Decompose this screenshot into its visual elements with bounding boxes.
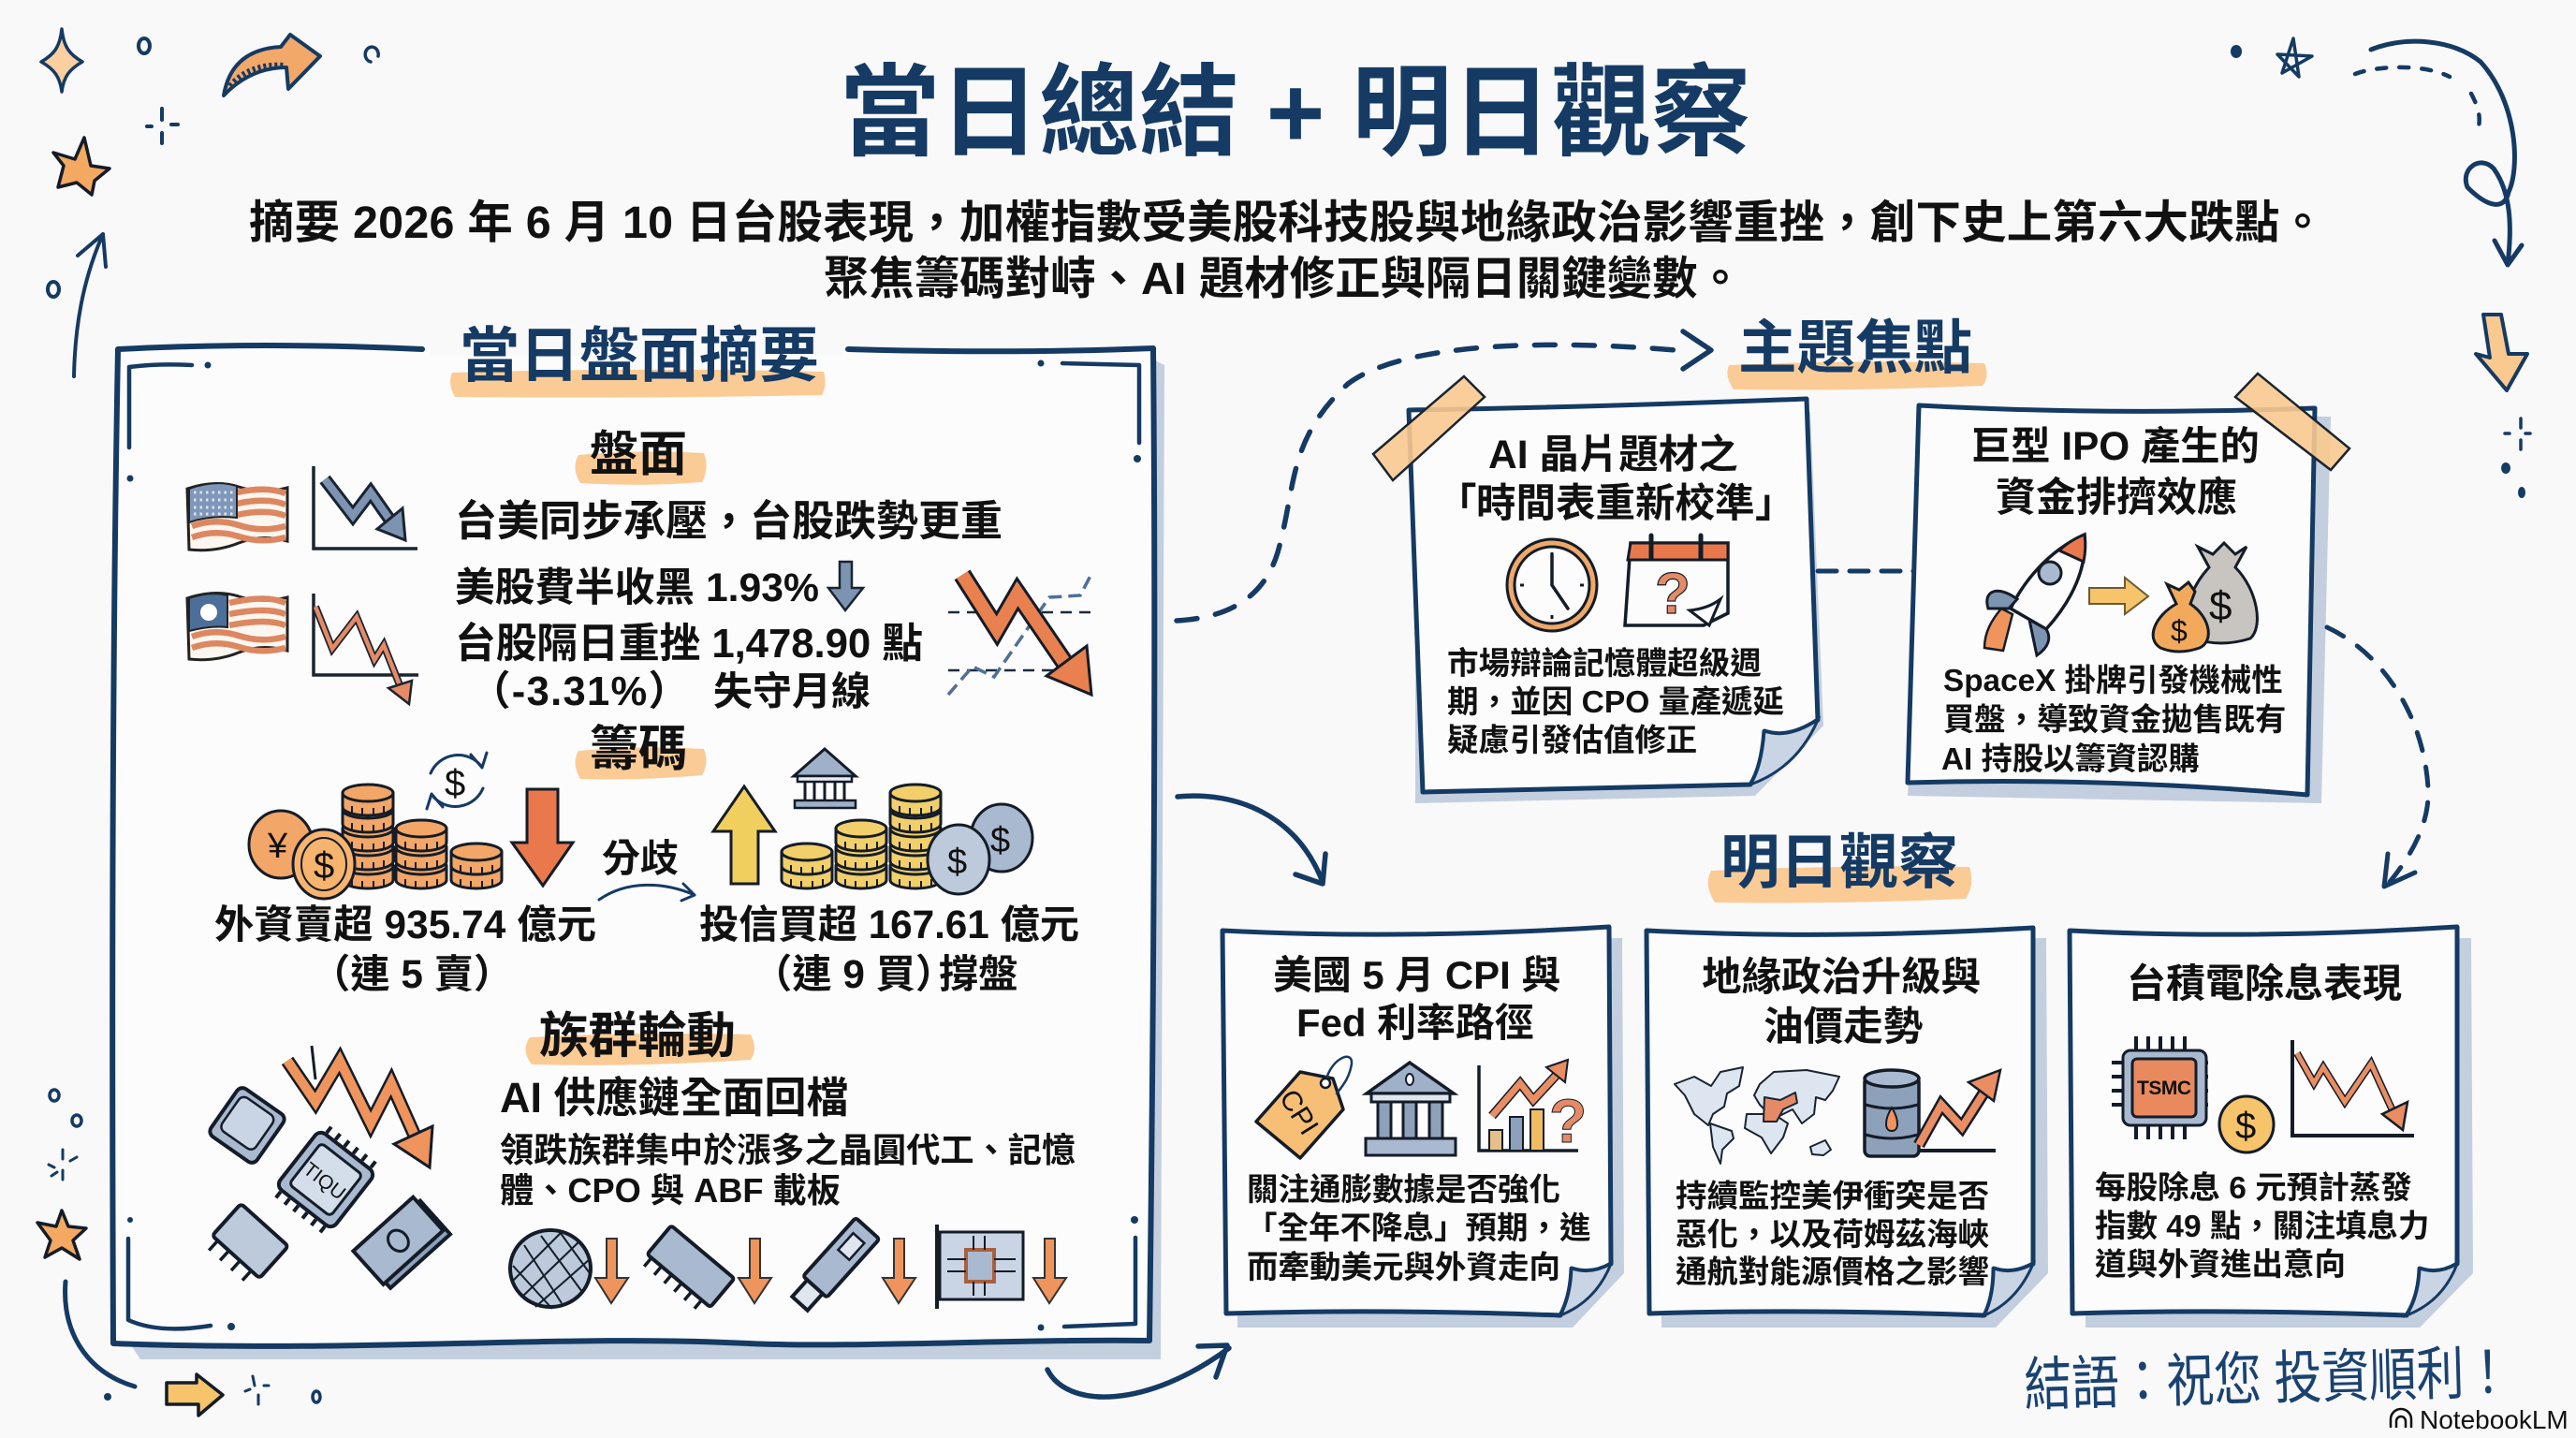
section: 盤面: 盤面 — [590, 428, 687, 482]
subtitle: 摘要 2026 年 6 月 10 日台股表現，加權指數受美股科技股與地緣政治影響重挫，創下史上第六大跌點。 — [249, 198, 2325, 248]
icon: falling chart — [2292, 1040, 2414, 1136]
icon: dividend coin — [2219, 1096, 2274, 1152]
tape — [2235, 374, 2349, 470]
icon: world map — [1675, 1067, 1839, 1164]
logo: NotebookLM: NotebookLM — [2420, 1405, 2569, 1434]
card: CPI: 「全年不降息」預期，進 — [1246, 1211, 1591, 1246]
heading: 當日盤面摘要 — [460, 322, 819, 389]
icon: US flag — [187, 483, 287, 550]
icon: institutional coins — [782, 785, 1032, 894]
icon: uncertain rate chart — [1479, 1060, 1587, 1155]
text: 分歧: 分歧 — [602, 837, 679, 880]
text: trust buying — [699, 902, 1079, 996]
icon: falling chart US — [314, 466, 417, 549]
icon: currency cycle — [427, 753, 487, 809]
icon: currency cycle: $ — [445, 763, 465, 804]
connector: dashed between cards — [1818, 569, 1915, 573]
title: 當日總結 + 明日觀察 — [840, 56, 1751, 169]
text: foreign selling — [214, 902, 596, 996]
card: 地緣政治: 通航對能源價格之影響 — [1676, 1255, 1989, 1290]
icon: rising arrow — [1919, 1070, 2000, 1151]
arrow: dashed to 主題焦點 — [1177, 345, 1676, 621]
icon: money bags — [2153, 543, 2257, 652]
icon: Taiwan flag — [187, 593, 287, 660]
panel frame — [112, 348, 1154, 1346]
text: TAIEX: 台股隔日重挫 1,478.90 點 — [455, 621, 923, 667]
section: 籌碼: 籌碼 — [590, 723, 687, 777]
text: AI supply chain: 領跌族群集中於漲多之晶圓代工、記憶 — [500, 1131, 1076, 1169]
arrow: bottom curve — [1047, 1345, 1229, 1397]
arrowhead: 主題焦點 — [1683, 331, 1711, 369]
icon: arrow to bags — [2089, 578, 2148, 614]
card: 台積電 — [2070, 927, 2473, 1328]
text: foreign selling: 外資賣超 935.74 億元 — [214, 902, 596, 946]
card: 巨型 IPO: SpaceX 掛牌引發機械性 — [1943, 664, 2283, 698]
card: 地緣政治: 油價走勢 — [1764, 1005, 1924, 1049]
card: 巨型 IPO: 資金排擠效應 — [1996, 476, 2237, 521]
card: 台積電: 台積電除息表現 — [2127, 961, 2402, 1005]
card: AI 晶片: 疑慮引發估值修正 — [1447, 724, 1697, 758]
icon: calendar: ? — [1655, 562, 1690, 626]
arrow: panel to lower cards — [1178, 796, 1325, 884]
card: AI 晶片: 」 — [1755, 482, 1795, 526]
text: AI supply chain: AI 供應鏈全面回檔 — [500, 1074, 849, 1122]
icon: moving-average chart — [948, 575, 1097, 695]
arrowhead: right — [2384, 854, 2415, 887]
icon: red down arrow — [512, 789, 573, 886]
heading: 明日觀察: 明日觀察 — [1720, 830, 1958, 896]
icon: TSMC chip: TSMC — [2137, 1078, 2191, 1099]
decoration: bottom-left doodles — [37, 1090, 320, 1416]
card: 巨型 IPO: 買盤，導致資金拋售既有 — [1943, 703, 2286, 738]
arrow: divergence — [599, 884, 695, 901]
text: TAIEX: （-3.31%） — [470, 669, 689, 714]
icon: CPI tag: CPI — [1273, 1084, 1325, 1140]
text: foreign selling: （連 5 賣） — [311, 952, 513, 996]
text: TAIEX: 失守月線 — [713, 669, 871, 713]
card: 地緣政治: 惡化，以及荷姆茲海峽 — [1676, 1218, 1989, 1253]
text: SOX: 美股費半收黑 1.93% — [455, 565, 819, 610]
tape — [1373, 376, 1485, 480]
card: 地緣政治: 地緣政治升級與 — [1702, 955, 1981, 1000]
text: AI supply chain: 體、CPO 與 ABF 載板 — [500, 1171, 841, 1210]
card: AI 晶片: 時間表重新校準 — [1476, 482, 1755, 526]
icon: dividend coin: $ — [2235, 1106, 2256, 1147]
card: AI 晶片 — [1373, 376, 1823, 803]
text: TAIEX — [455, 621, 923, 714]
icon: clock — [1507, 539, 1597, 631]
card: 巨型 IPO: 巨型 IPO 產生的 — [1971, 424, 2260, 468]
icon: money bags: $ — [2209, 583, 2232, 629]
icon: institutional coins: $ — [947, 843, 967, 882]
card: AI 晶片: 期，並因 CPO 量產遞延 — [1447, 684, 1784, 720]
card: 地緣政治: 持續監控美伊衝突是否 — [1676, 1180, 1989, 1214]
icon: rocket — [1984, 535, 2086, 655]
icon: institutional coins: $ — [990, 821, 1010, 860]
card: 台積電: 指數 49 點，關注填息力 — [2095, 1210, 2429, 1244]
subtitle — [249, 198, 2325, 304]
card: 巨型 IPO: AI 持股以籌資認購 — [1941, 742, 2200, 777]
card: AI 晶片: AI 晶片題材之 — [1488, 433, 1738, 477]
icons: wafer, memory, optics, substrate with arrows — [510, 1218, 1066, 1315]
icon: central bank — [1366, 1063, 1456, 1155]
icon: foreign coins: $ — [314, 845, 334, 887]
panel shadow — [131, 360, 1164, 1359]
icon: yellow up arrow — [713, 786, 775, 884]
card: AI 晶片: 「 — [1437, 482, 1477, 526]
icon: small down arrow — [828, 562, 863, 610]
icon: foreign coins — [249, 785, 502, 899]
icon: TSMC chip — [2112, 1036, 2208, 1139]
card: CPI: 而牽動美元與外資走向 — [1247, 1251, 1560, 1285]
card: CPI: 美國 5 月 CPI 與 — [1273, 953, 1560, 997]
icon: tilted chips — [203, 1085, 450, 1290]
card: AI 晶片: 市場辯論記憶體超級週 — [1447, 646, 1762, 682]
card: 巨型 IPO — [1908, 374, 2349, 803]
text: AI supply chain — [500, 1074, 1076, 1210]
decoration: top-left doodles — [41, 29, 378, 376]
text: trust buying: 投信買超 167.61 億元 — [699, 902, 1079, 946]
text: trust buying: 撐盤 — [939, 952, 1018, 996]
text: headline: 台美同步承壓，台股跌勢更重 — [455, 497, 1003, 545]
heading highlight — [450, 370, 826, 398]
icon: CPI tag — [1256, 1057, 1352, 1158]
closing message: 結語：祝您 投資順利！ — [2024, 1342, 2512, 1418]
card: CPI: Fed 利率路徑 — [1296, 1001, 1534, 1045]
card: CPI: 關注通膨數據是否強化 — [1247, 1173, 1560, 1208]
card: 台積電: 每股除息 6 元預計蒸發 — [2095, 1171, 2412, 1206]
icon: tilted chips: TIQU — [300, 1158, 349, 1204]
text: trust buying: （連 9 買） — [753, 952, 955, 996]
icon: falling chart TW — [314, 594, 418, 704]
card: CPI — [1222, 927, 1624, 1328]
icon: oil barrel — [1865, 1070, 1919, 1156]
subtitle: 聚焦籌碼對峙、AI 題材修正與隔日關鍵變數。 — [824, 254, 1743, 304]
icon: bank — [794, 749, 856, 808]
section: 族群輪動: 族群輪動 — [539, 1008, 736, 1064]
icon: uncertain rate chart: ? — [1549, 1086, 1587, 1155]
decoration: top-right doodles — [2231, 38, 2530, 498]
card: 台積電: 道與外資進出意向 — [2095, 1248, 2346, 1283]
icon: lightning drop — [287, 1046, 432, 1167]
panel: 當日盤面摘要 — [112, 322, 1164, 1359]
arrow: dashed to 明日觀察 cards — [2327, 627, 2428, 882]
card: 地緣政治 — [1647, 928, 2048, 1328]
icon: foreign coins: ¥ — [267, 827, 288, 866]
heading: 主題焦點: 主題焦點 — [1738, 315, 1972, 381]
icon: calendar — [1625, 536, 1728, 626]
icon: money bags: $ — [2171, 614, 2188, 648]
